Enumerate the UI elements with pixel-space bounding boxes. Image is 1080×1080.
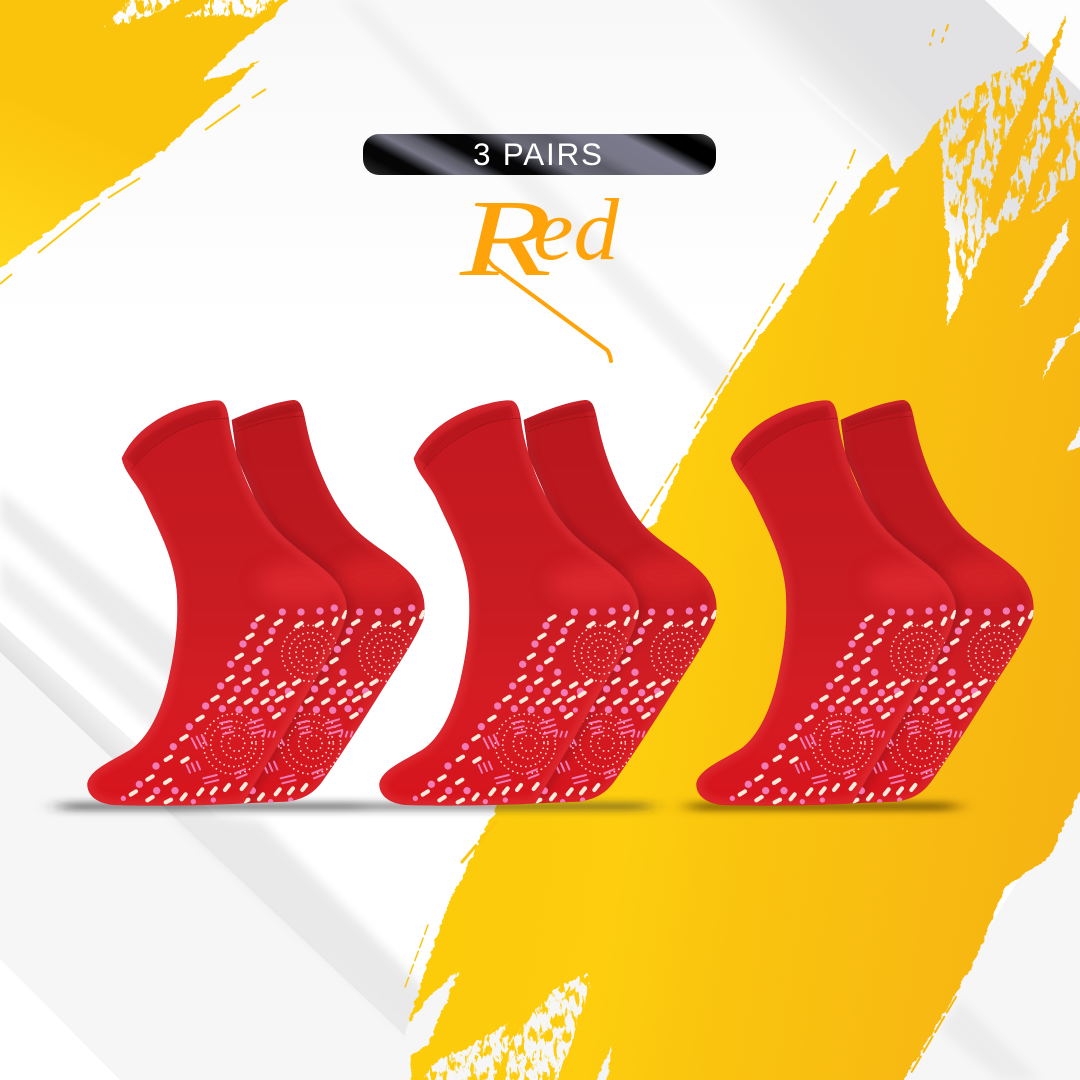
yellow paint: main diagonal: [402, 13, 1080, 1080]
speckled brush: top right: [935, 13, 1080, 310]
speckled brush: bottom: [402, 972, 590, 1080]
yellow paint: top-left: [0, 0, 305, 284]
yellow flecks: [404, 25, 956, 1073]
paint scratches: notches: [594, 187, 1080, 1080]
ground shadows: [60, 802, 955, 811]
badge: 3 PAIRS: [363, 134, 716, 175]
heading: Red: R: [459, 177, 552, 299]
socks: pair 3: [696, 400, 1034, 806]
socks: pair 2: [379, 400, 717, 806]
heading: Red: [459, 177, 620, 361]
socks: pair 1: [87, 400, 425, 806]
heading: Red: ed: [533, 182, 620, 279]
badge: 3 PAIRS: 3 PAIRS: [473, 136, 602, 172]
